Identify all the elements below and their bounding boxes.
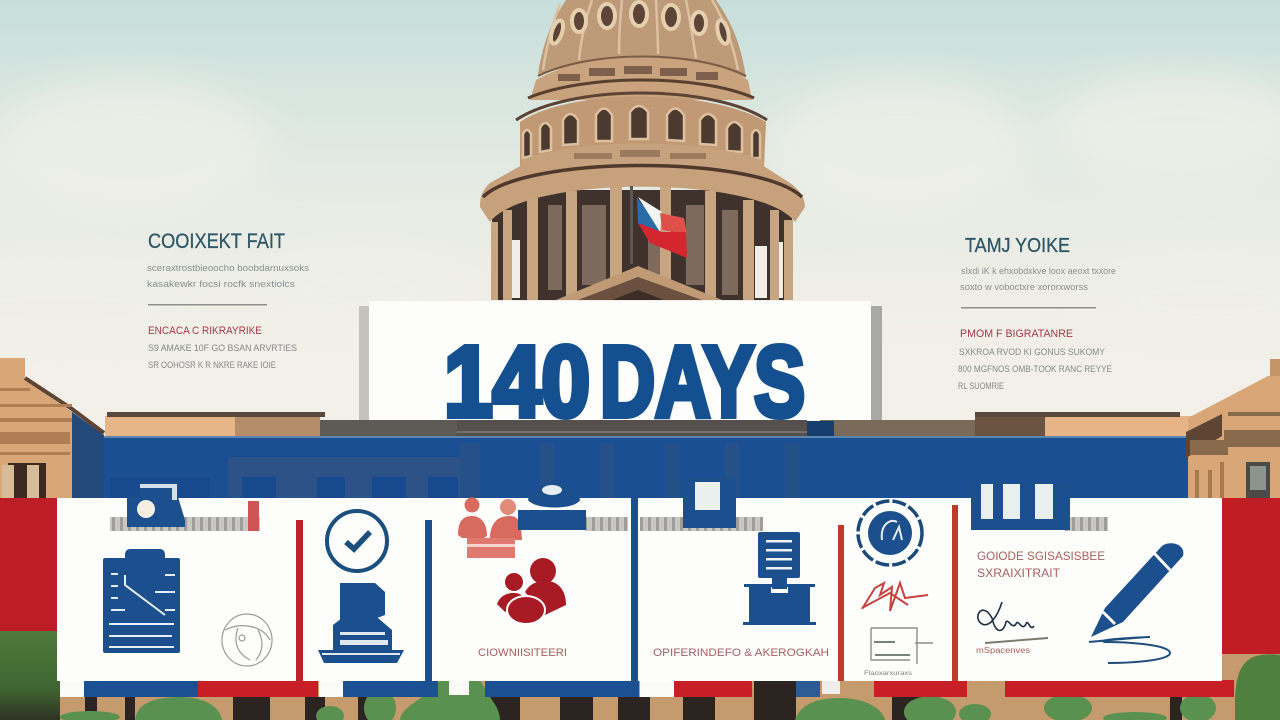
grey label bar	[640, 517, 763, 531]
headline: 140	[444, 326, 590, 438]
blue facade	[72, 436, 1190, 499]
left shrub	[0, 631, 60, 720]
icon: pink committee	[458, 498, 522, 558]
committee caption: CIOWNIISITEERI	[478, 647, 567, 659]
right body text: sIxdi iK k ehxobdxkve loox aeoxt txxore	[961, 266, 1116, 276]
icon: ballot box	[318, 583, 404, 663]
sky background	[0, 0, 1280, 440]
icon: red tick	[248, 501, 259, 531]
cards background	[57, 498, 1222, 681]
icon: check circle	[327, 511, 387, 571]
icon: sketch ball	[222, 614, 272, 666]
left red subheading: ENCACA C RIKRAYRIKE	[148, 325, 262, 337]
signature heading: SXRAIXITRAIT	[977, 568, 1060, 580]
left red section body: SR OOHOSR K R NKRE RAKE IOIE	[148, 360, 276, 371]
dome ring	[528, 56, 754, 100]
icon: gear badge	[858, 501, 922, 565]
right red section body: RL SUOMRIE	[958, 381, 1004, 392]
headline	[444, 326, 805, 438]
signature heading	[977, 551, 1105, 580]
grey label bar	[1065, 517, 1108, 531]
pediment	[556, 266, 722, 300]
icon: blue dome block	[518, 483, 586, 530]
signature scrawl	[978, 602, 1034, 630]
left body text	[147, 263, 310, 289]
right red section body: SXKROA RVOD KI GONUS SUKOMY	[959, 347, 1106, 358]
icon: pen	[1091, 543, 1183, 637]
card 5: review	[858, 501, 933, 677]
card 1: agenda	[103, 482, 272, 666]
right body text	[960, 266, 1116, 292]
grey label bar	[586, 517, 628, 531]
flag	[630, 186, 687, 264]
right text column	[958, 235, 1116, 392]
card 2: vote	[318, 511, 404, 663]
roof left	[105, 412, 325, 437]
bottom shrubs	[60, 680, 1216, 720]
icon: three window block	[971, 482, 1070, 530]
signature caption: mSpacenves	[976, 646, 1030, 655]
right body text: soxto w voboctxre xororxworss	[960, 282, 1089, 292]
card 6: signature	[971, 482, 1183, 663]
left pavilion	[0, 358, 104, 498]
right red section body	[958, 347, 1112, 392]
icon: window block	[683, 478, 736, 528]
left heading: COOIXEKT FAIT	[148, 230, 285, 253]
left red section body: S9 AMAKE 10F GO BSAN ARVRTIES	[148, 343, 297, 354]
capitol dome	[480, 0, 805, 300]
right red section body: 800 MGFNOS OMB-TOOK RANC REYYE	[958, 364, 1112, 375]
left body text: kasakewkr focsi rocfk snextiolcs	[147, 279, 296, 289]
arcade drum	[516, 93, 767, 170]
right red subheading: PMOM F BIGRATANRE	[960, 328, 1073, 340]
icon: red scribble	[862, 583, 928, 611]
proposals caption: OPIFERINDEFO & AKEROGKAH	[653, 647, 829, 659]
roof right	[975, 412, 1195, 437]
left red section body	[148, 343, 297, 371]
card 4: proposals	[640, 478, 829, 659]
card 3: committee	[458, 483, 628, 659]
icon: clipboard	[103, 549, 180, 653]
grey label bar	[110, 517, 260, 531]
left body text: sceraxtrostbieoocho boobdarnuxsoks	[147, 263, 310, 273]
icon: camera block	[127, 482, 185, 527]
icon: pen swoosh	[1089, 637, 1170, 663]
right shrub	[1235, 654, 1280, 720]
signature heading: GOIODE SGISASISBEE	[977, 551, 1105, 563]
icon: document in box	[743, 532, 816, 625]
signature line	[985, 638, 1048, 643]
headline banner	[359, 301, 882, 438]
capitol building base	[0, 358, 1280, 499]
side red panels	[0, 498, 1280, 654]
dome cap	[538, 0, 746, 78]
left text column	[147, 230, 310, 371]
right pavilion	[1186, 359, 1280, 498]
icon: small form	[871, 628, 933, 664]
ground and shrubs	[0, 631, 1280, 720]
headline: DAYS	[600, 326, 805, 438]
colonnade	[480, 165, 805, 300]
roof center	[320, 420, 975, 443]
icon: red people	[497, 558, 566, 624]
right heading: TAMJ YOIKE	[965, 235, 1070, 257]
colored strip below cards	[60, 680, 1234, 697]
small form caption: Flaoxarxuraxs	[864, 671, 912, 677]
